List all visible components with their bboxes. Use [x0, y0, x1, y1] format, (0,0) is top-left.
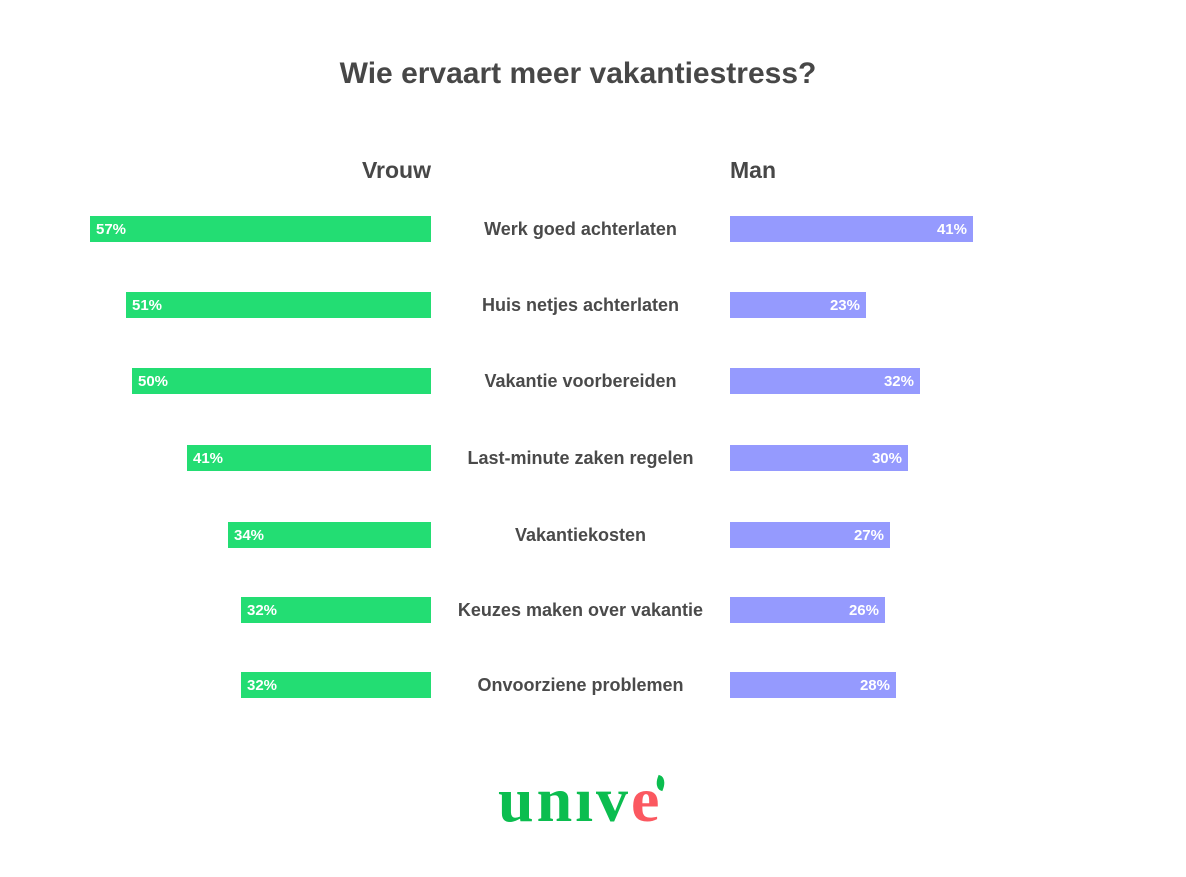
- row 6: 26%: [849, 602, 879, 619]
- row 5: 34%: [234, 527, 264, 544]
- row 5: Vakantiekosten: [515, 525, 646, 545]
- row 1: Werk goed achterlaten: [484, 219, 677, 239]
- row 3: Vakantie voorbereiden: [484, 371, 677, 391]
- row 1: [90, 216, 973, 242]
- row 4: [187, 445, 908, 471]
- row 2: Huis netjes achterlaten: [482, 295, 679, 315]
- row 2: 51%: [132, 297, 162, 314]
- row 7: Onvoorziene problemen: [477, 675, 684, 695]
- icon: leaf: [654, 775, 667, 791]
- row 2: [126, 292, 866, 318]
- row 3: 50%: [138, 373, 168, 390]
- row 3: 32%: [884, 373, 914, 390]
- row 2: 23%: [830, 297, 860, 314]
- heading: Vrouw: Vrouw: [362, 157, 431, 183]
- row 7: 32%: [247, 677, 277, 694]
- row 3: [132, 368, 920, 394]
- row 4: 41%: [193, 450, 223, 467]
- row 7: [241, 672, 896, 698]
- logo: unıve: [498, 764, 662, 835]
- row 4: 30%: [872, 450, 902, 467]
- row 5: 27%: [854, 527, 884, 544]
- heading: Man: Man: [730, 157, 776, 183]
- row 6: 32%: [247, 602, 277, 619]
- row 7: 28%: [860, 677, 890, 694]
- title: Wie ervaart meer vakantiestress?: [340, 57, 816, 90]
- row 6: [241, 597, 885, 623]
- row 6: Keuzes maken over vakantie: [458, 600, 703, 620]
- row 5: [228, 522, 890, 548]
- row 1: 41%: [937, 221, 967, 238]
- row 4: Last-minute zaken regelen: [467, 448, 694, 468]
- row 1: 57%: [96, 221, 126, 238]
